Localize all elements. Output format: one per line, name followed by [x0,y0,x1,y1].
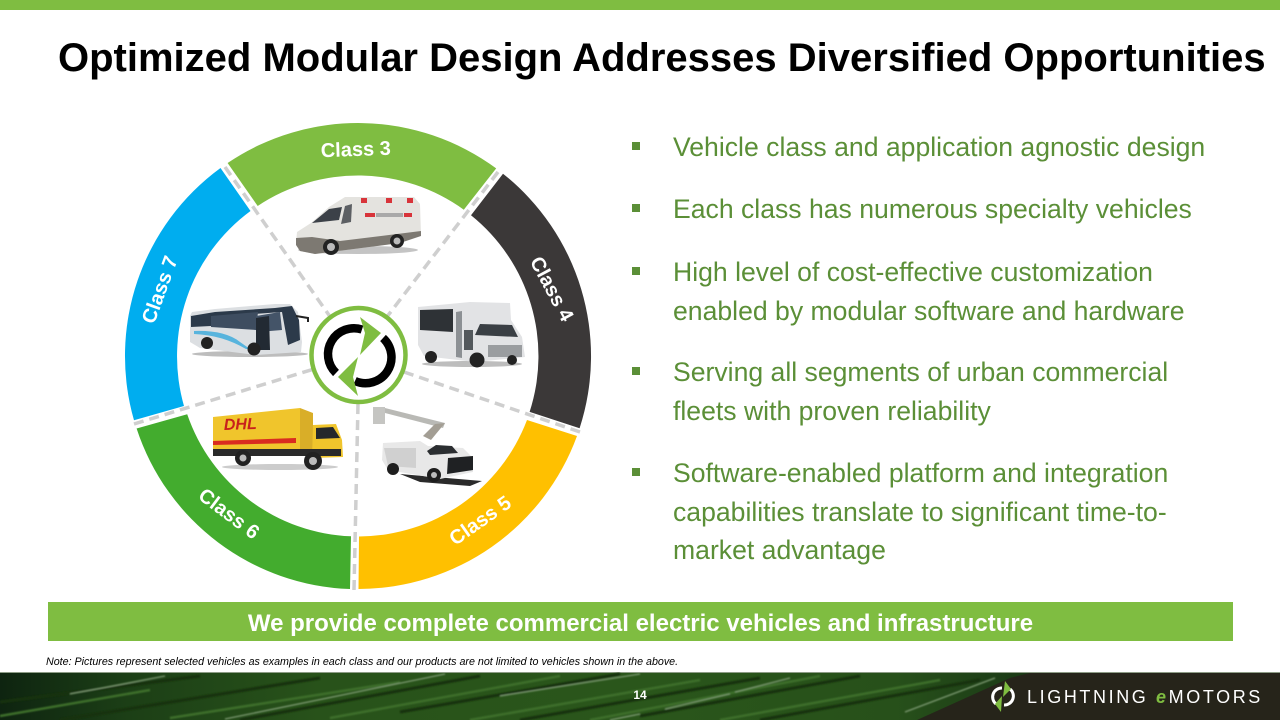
bullet 4: Serving all segments of urban commercial [673,357,1168,387]
bullet 5: capabilities translate to significant time-to- [673,496,1167,526]
segment: Class 7: Class 7 [138,253,183,327]
bullet 5: market advantage [673,535,886,565]
bullet 3: enabled by modular software and hardware [673,296,1185,326]
bullet 4: fleets with proven reliability [673,396,991,426]
footer logo [991,681,1263,712]
vehicle: shuttle bus [418,302,525,368]
callout banner: We provide complete commercial electric vehicles and infrastructure [248,610,1033,637]
top accent bar [0,0,1280,10]
segment: Class 3 [228,123,496,210]
segment: Class 6: Class 6 [194,484,263,544]
vehicle: bucket boom truck [373,407,482,486]
segment: Class 4 [471,174,591,428]
segment dividers [134,167,580,590]
segment: Class 4: Class 4 [525,253,578,326]
callout banner [48,602,1233,641]
logo icon [991,681,1015,712]
logo wordmark: LIGHTNING eMOTORS [1027,687,1263,707]
bullet 3 [632,257,1185,326]
bullet 5 [632,458,1168,565]
vehicle: DHL box truck: DHL [224,416,257,434]
footer grass streaks [0,672,1280,720]
bullet list [632,132,1205,565]
bullet 1: Vehicle class and application agnostic design [673,132,1205,162]
segment: Class 7 [125,168,250,420]
bullet 5: Software-enabled platform and integration [673,458,1168,488]
vehicle: ambulance van [296,197,421,255]
segment: Class 5 [358,420,577,589]
bullet 3: High level of cost-effective customization [673,257,1153,287]
bullet 4 [632,357,1168,426]
segment: Class 6 [137,414,351,589]
title: Optimized Modular Design Addresses Diversified Opportunities [58,36,1266,80]
vehicle: DHL box truck [213,408,343,470]
segment: Class 5: Class 5 [446,492,516,550]
segment: Class 3: Class 3 [320,138,391,162]
bullet 2: Each class has numerous specialty vehicles [673,194,1192,224]
footnote: Note: Pictures represent selected vehicles as examples in each class and our products are not limited to vehicles shown in the above. [46,656,678,668]
vehicle: coach bus [190,304,308,357]
page number: 14 [633,688,647,702]
footer band [0,672,1280,720]
centre logo icon [312,308,406,402]
